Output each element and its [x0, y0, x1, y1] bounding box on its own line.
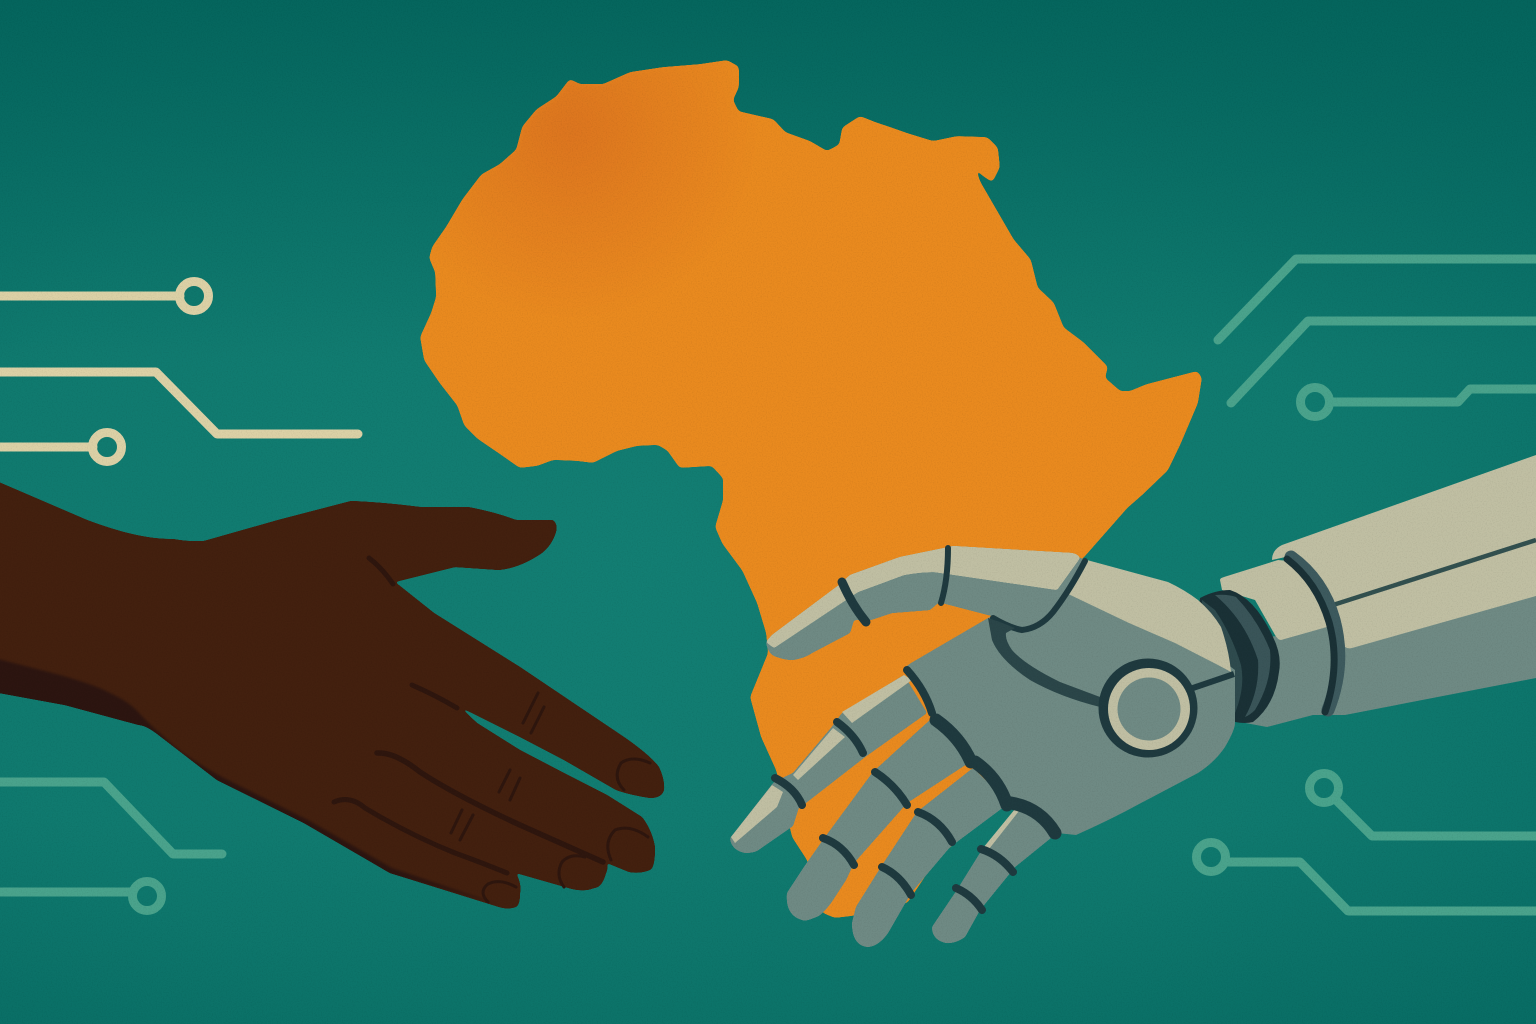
circuit traces: cream, upper left — [0, 282, 358, 462]
back of hand plate — [1064, 560, 1231, 672]
forearm ring joint — [1291, 557, 1339, 710]
wrist outer band — [1215, 595, 1270, 717]
circuit traces: green, lower left — [0, 782, 222, 910]
forearm ring dark groove — [1287, 559, 1334, 712]
circuit traces: green, upper right — [1218, 259, 1536, 416]
wrist joint — [1195, 590, 1280, 723]
forearm groove — [1333, 540, 1536, 605]
forearm upper plate — [1272, 455, 1536, 648]
palm — [904, 560, 1235, 835]
robot hand — [730, 546, 1235, 947]
forearm shadow side — [1240, 560, 1536, 727]
index finger — [730, 670, 932, 853]
ring finger — [852, 768, 1009, 947]
wrist inner band — [1200, 600, 1242, 720]
palm channel lines — [988, 618, 1100, 707]
joint ring — [1098, 658, 1198, 758]
human hand — [0, 480, 664, 908]
thumb — [766, 546, 1087, 660]
robot arm — [1195, 455, 1536, 727]
wrist collar plate — [1220, 560, 1327, 640]
hand silhouette and wrist shadow — [0, 480, 664, 908]
map of Africa — [420, 60, 1201, 917]
creases and knuckle ticks — [334, 558, 650, 902]
pinky finger — [932, 808, 1057, 943]
circuit traces: green, lower right — [1196, 774, 1536, 911]
knuckle joints — [936, 720, 1055, 833]
middle finger — [787, 717, 973, 921]
